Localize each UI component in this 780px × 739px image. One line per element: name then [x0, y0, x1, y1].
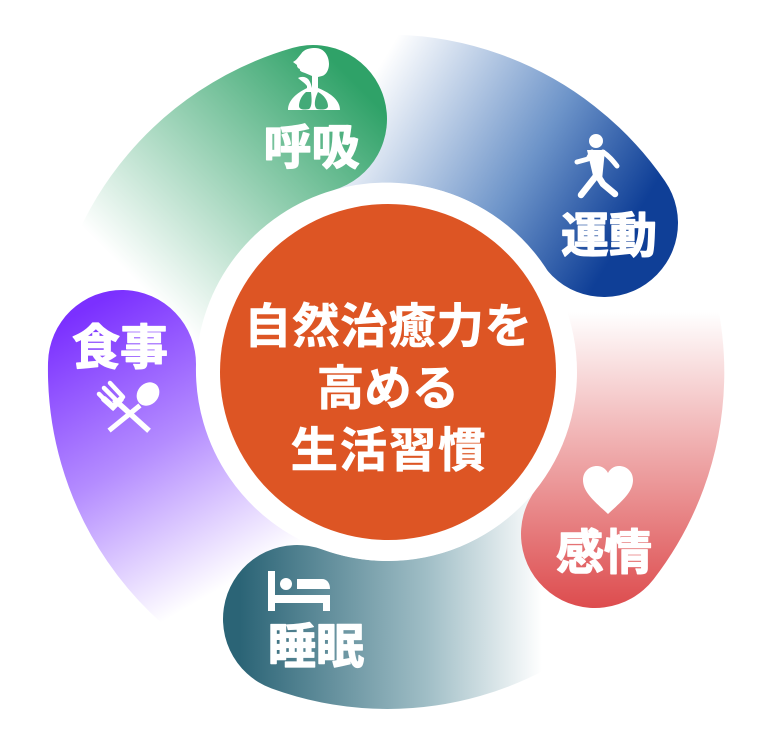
label: 運動: 運動: [561, 210, 657, 263]
label: 呼吸: 呼吸: [264, 122, 360, 175]
label: 食事: 食事: [72, 322, 168, 375]
icon: walking person: [577, 134, 617, 195]
label: 感情: 感情: [556, 527, 652, 580]
icon: lungs and head: [288, 48, 340, 110]
petal: 睡眠: [297, 534, 595, 635]
icon: fork and spoon: [99, 378, 164, 429]
petal: 食事: [122, 364, 297, 619]
center circle: 自然治癒力を高める生活習慣: [220, 204, 556, 540]
center heading: 自然治癒力を: [244, 301, 532, 354]
label: 睡眠: 睡眠: [268, 621, 364, 674]
center heading: [244, 301, 532, 478]
center heading: 高める: [317, 363, 459, 416]
petal: 感情: [595, 223, 650, 534]
icon: heart: [583, 466, 633, 514]
petal: 運動: [313, 109, 604, 223]
center heading: 生活習慣: [290, 425, 486, 478]
white ring: [199, 183, 577, 561]
petal: 呼吸: [122, 119, 313, 364]
icon: bed: [268, 571, 330, 611]
